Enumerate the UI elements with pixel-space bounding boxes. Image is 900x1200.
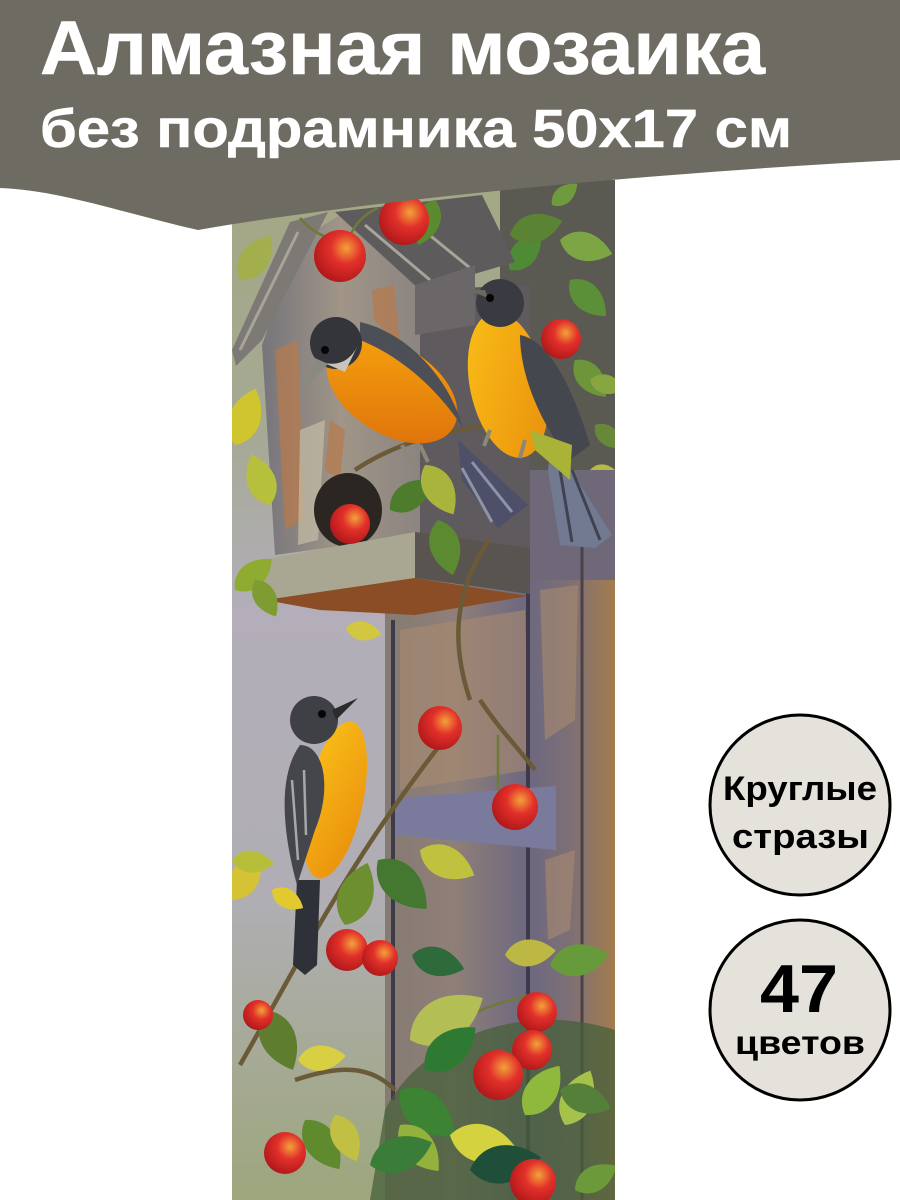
title line 1: Алмазная мозаика — [40, 6, 766, 91]
tail stripes of bird 1 — [462, 462, 512, 522]
pale streak on the house — [298, 420, 325, 545]
birdhouse side wall — [415, 285, 530, 550]
warm paint patches on the post — [400, 585, 578, 940]
badge: 47 colours — [710, 920, 890, 1100]
right plank — [528, 470, 615, 580]
left roof slope — [232, 212, 328, 366]
badge: round rhinestones — [710, 715, 890, 895]
leaves: upper branch — [228, 196, 467, 579]
badge: round rhinestones: стразы — [732, 818, 869, 856]
post metal bracket — [395, 786, 556, 850]
wooden post — [385, 560, 615, 1200]
painting background — [232, 190, 500, 1200]
wing highlights of bird 3 — [292, 770, 306, 860]
roof shingle highlights — [240, 215, 470, 350]
painting: birds on a birdhouse with cherries — [220, 177, 629, 1200]
feet of bird 2 — [484, 430, 525, 458]
title banner — [0, 0, 900, 230]
bird 2: orange bird at the right — [455, 279, 612, 548]
cherry stems — [300, 208, 530, 1015]
leaves: lower right cluster — [292, 937, 623, 1200]
bird 1: orange bird on the house — [305, 315, 528, 528]
birdhouse platform — [262, 532, 530, 615]
right roof slope — [335, 195, 515, 290]
birdhouse hole — [314, 473, 382, 547]
post plank lines — [391, 594, 530, 1151]
orange paint streaks on the house — [275, 285, 400, 530]
bird 3: yellow bird on the branch — [284, 696, 368, 975]
title line 2: без подрамника 50х17 см — [40, 99, 792, 159]
tail stripes of bird 2 — [560, 470, 600, 542]
feet of bird 1 — [402, 445, 428, 462]
upper post behind the house — [500, 180, 615, 470]
leaves: middle cluster — [232, 844, 474, 1070]
small roof dormer — [415, 265, 475, 335]
cherries — [243, 195, 581, 1200]
leaves: left edge — [232, 388, 382, 640]
badge: 47 colours: 47 — [760, 951, 838, 1027]
badge: round rhinestones: Круглые — [723, 770, 877, 808]
badge: 47 colours: цветов — [735, 1024, 865, 1061]
foliage behind the house, top right — [508, 184, 615, 470]
main vine — [240, 425, 535, 1090]
dense green foliage backing, lower right — [370, 1020, 615, 1200]
birdhouse front wall — [262, 215, 420, 555]
